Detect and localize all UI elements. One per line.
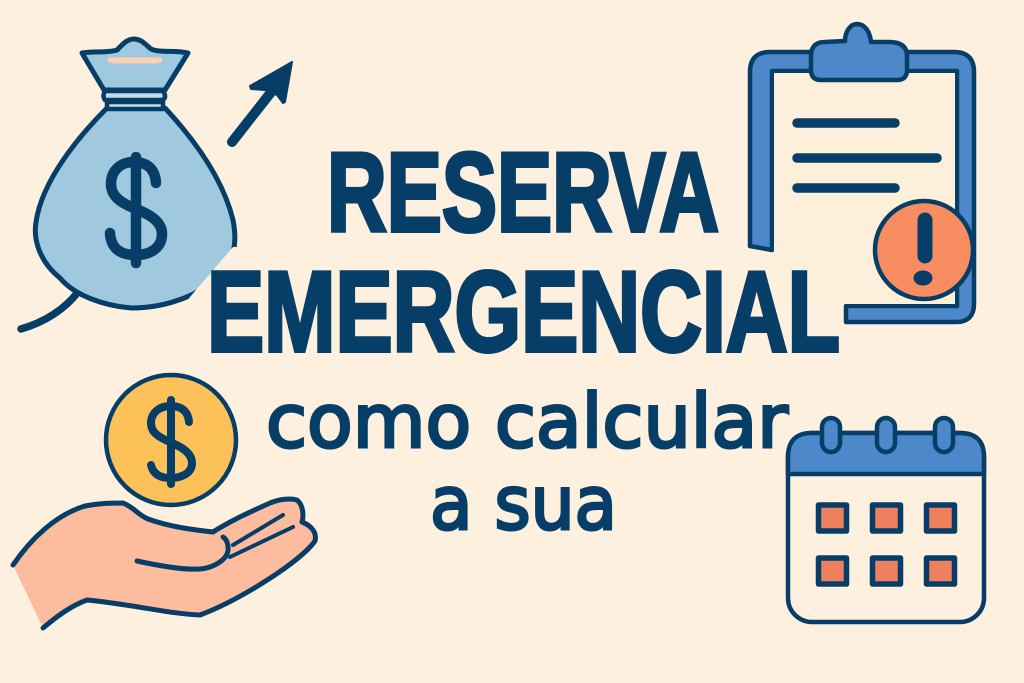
hand shape bbox=[13, 499, 315, 628]
icon: clipboard with alert bbox=[750, 24, 974, 322]
clipboard paper bbox=[774, 73, 955, 304]
title: Reserva: RESERVA bbox=[327, 130, 719, 255]
icon: soft fade over bag corner bbox=[180, 247, 245, 311]
bag body bbox=[35, 108, 235, 308]
alert badge bbox=[875, 201, 973, 299]
calendar header bbox=[788, 433, 984, 474]
icon: rising arrow bbox=[232, 62, 292, 142]
hand palm crease bbox=[137, 537, 228, 569]
subtitle: como calcular: como calcular bbox=[266, 379, 789, 465]
icon: dollar sign on coin bbox=[151, 400, 192, 484]
calendar rings bbox=[822, 418, 953, 452]
calendar body bbox=[788, 433, 984, 622]
bag top highlight bbox=[110, 60, 160, 61]
clipboard text lines bbox=[797, 123, 937, 188]
bag neck bands bbox=[104, 91, 165, 109]
bag tail curve bbox=[21, 292, 78, 329]
clipboard clip bbox=[811, 24, 907, 80]
icon: coin bbox=[106, 375, 236, 505]
clipboard board bbox=[750, 52, 974, 322]
fingers bbox=[230, 515, 293, 557]
icon: open hand bbox=[13, 499, 315, 628]
bag top flare bbox=[82, 39, 188, 90]
hand outline bbox=[13, 499, 315, 628]
subtitle: a sua: a sua bbox=[430, 461, 617, 547]
icon: calendar bbox=[788, 418, 984, 622]
icon: money bag bbox=[21, 39, 292, 329]
calendar day squares bbox=[818, 505, 954, 584]
icon: dollar sign on bag bbox=[110, 157, 162, 263]
